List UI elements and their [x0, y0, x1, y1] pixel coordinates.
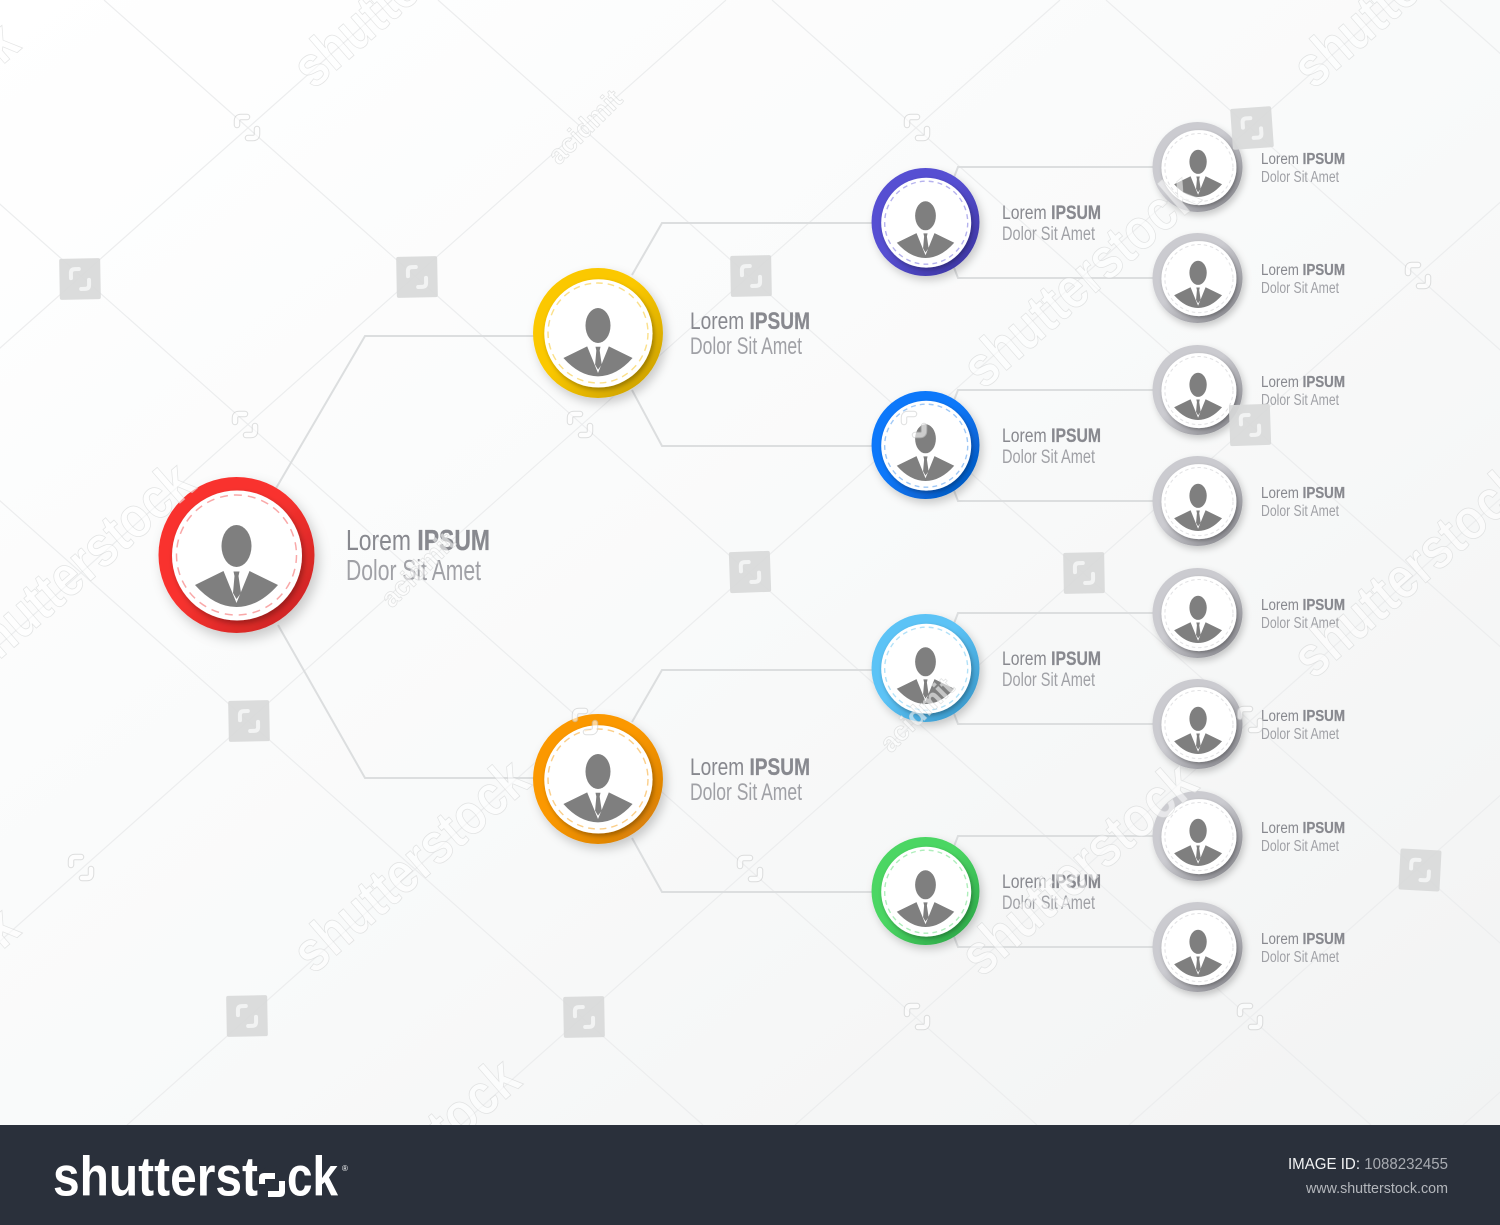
- label: gray 2: [1261, 262, 1345, 297]
- watermark text: shutterstock: [280, 745, 542, 985]
- label: green: Lorem IPSUM: [1002, 871, 1101, 893]
- label: purple: Lorem IPSUM: [1002, 202, 1101, 224]
- label: gray 5: [1261, 597, 1345, 632]
- label: gray 1: Dolor Sit Amet: [1261, 169, 1340, 186]
- footer logo: ck: [287, 1144, 339, 1208]
- avatar: gray 8: [1152, 902, 1243, 992]
- node: purple: [872, 168, 1101, 276]
- node: sky blue: [872, 614, 1101, 722]
- label: blue: [1002, 425, 1101, 468]
- avatar: green: [872, 837, 979, 945]
- label: orange: [690, 754, 810, 806]
- avatar: blue: [872, 391, 979, 499]
- website: www.shutterstock.com: [1305, 1181, 1448, 1197]
- label: gray 6: Lorem IPSUM: [1261, 708, 1345, 725]
- node: gray 3: [1152, 345, 1345, 435]
- label: orange: Lorem IPSUM: [690, 754, 810, 781]
- avatar: gray 1: [1152, 122, 1243, 212]
- node: root red: [158, 477, 490, 633]
- label: gray 1: Lorem IPSUM: [1261, 151, 1345, 168]
- footer logo: o: [259, 1144, 285, 1208]
- label: red: Lorem IPSUM: [346, 525, 490, 557]
- label: sky blue: Lorem IPSUM: [1002, 648, 1101, 670]
- label: sky blue: [1002, 648, 1101, 691]
- label: orange: Dolor Sit Amet: [690, 779, 802, 806]
- footer logo: ®: [342, 1164, 348, 1173]
- label: gray 3: Lorem IPSUM: [1261, 374, 1345, 391]
- avatar: sky blue: [872, 614, 979, 722]
- label: gray 7: [1261, 820, 1345, 855]
- watermark text: acidmit: [375, 527, 461, 613]
- label: gray 5: Lorem IPSUM: [1261, 597, 1345, 614]
- avatar: gray 5: [1152, 568, 1243, 658]
- label: blue: Lorem IPSUM: [1002, 425, 1101, 447]
- watermark text: shutterstock: [948, 748, 1210, 988]
- label: red: [346, 525, 490, 587]
- label: gray 4: [1261, 485, 1345, 520]
- label: sky blue: Dolor Sit Amet: [1002, 669, 1095, 691]
- connector lines: [275, 167, 1155, 947]
- label: gray 7: Dolor Sit Amet: [1261, 838, 1340, 855]
- label: gray 7: Lorem IPSUM: [1261, 820, 1345, 837]
- node: gray 7: [1152, 791, 1345, 881]
- avatar: gray 6: [1152, 679, 1243, 769]
- label: green: [1002, 871, 1101, 914]
- label: gray 3: Dolor Sit Amet: [1261, 392, 1340, 409]
- label: purple: Dolor Sit Amet: [1002, 223, 1095, 245]
- label: yellow: [690, 308, 810, 360]
- label: gray 8: [1261, 931, 1345, 966]
- label: gray 8: Dolor Sit Amet: [1261, 949, 1340, 966]
- label: gray 4: Dolor Sit Amet: [1261, 503, 1340, 520]
- label: gray 8: Lorem IPSUM: [1261, 931, 1345, 948]
- avatar: orange: [533, 714, 663, 844]
- node: gray 6: [1152, 679, 1345, 769]
- node: orange: [533, 714, 810, 844]
- image id: IMAGE ID: 1088232455: [1288, 1156, 1448, 1173]
- node: yellow: [533, 268, 810, 398]
- label: yellow: Lorem IPSUM: [690, 308, 810, 335]
- watermark text: acidmit: [874, 672, 960, 758]
- watermark text: shutterstock: [950, 160, 1212, 400]
- footer bar: [0, 1125, 1500, 1225]
- avatar: red: [158, 477, 314, 633]
- node: green: [872, 837, 1101, 945]
- node: gray 1: [1152, 122, 1345, 212]
- watermark text: acidmit: [542, 84, 628, 170]
- node: gray 5: [1152, 568, 1345, 658]
- label: gray 2: Lorem IPSUM: [1261, 262, 1345, 279]
- avatar: gray 7: [1152, 791, 1243, 881]
- label: yellow: Dolor Sit Amet: [690, 333, 802, 360]
- label: gray 4: Lorem IPSUM: [1261, 485, 1345, 502]
- avatar: gray 3: [1152, 345, 1243, 435]
- avatar: yellow: [533, 268, 663, 398]
- label: green: Dolor Sit Amet: [1002, 892, 1095, 914]
- label: red: Dolor Sit Amet: [346, 555, 481, 587]
- label: gray 6: Dolor Sit Amet: [1261, 726, 1340, 743]
- label: gray 2: Dolor Sit Amet: [1261, 280, 1340, 297]
- node: gray 4: [1152, 456, 1345, 546]
- label: gray 6: [1261, 708, 1345, 743]
- avatar: purple: [872, 168, 979, 276]
- node: blue: [872, 391, 1101, 499]
- label: gray 1: [1261, 151, 1345, 186]
- label: blue: Dolor Sit Amet: [1002, 446, 1095, 468]
- node: gray 2: [1152, 233, 1345, 323]
- node: gray 8: [1152, 902, 1345, 992]
- label: gray 3: [1261, 374, 1345, 409]
- avatar: gray 2: [1152, 233, 1243, 323]
- label: gray 5: Dolor Sit Amet: [1261, 615, 1340, 632]
- footer logo: shutterst: [53, 1144, 258, 1208]
- avatar: gray 4: [1152, 456, 1243, 546]
- watermark tiles and marks: [59, 106, 1442, 1038]
- label: purple: [1002, 202, 1101, 245]
